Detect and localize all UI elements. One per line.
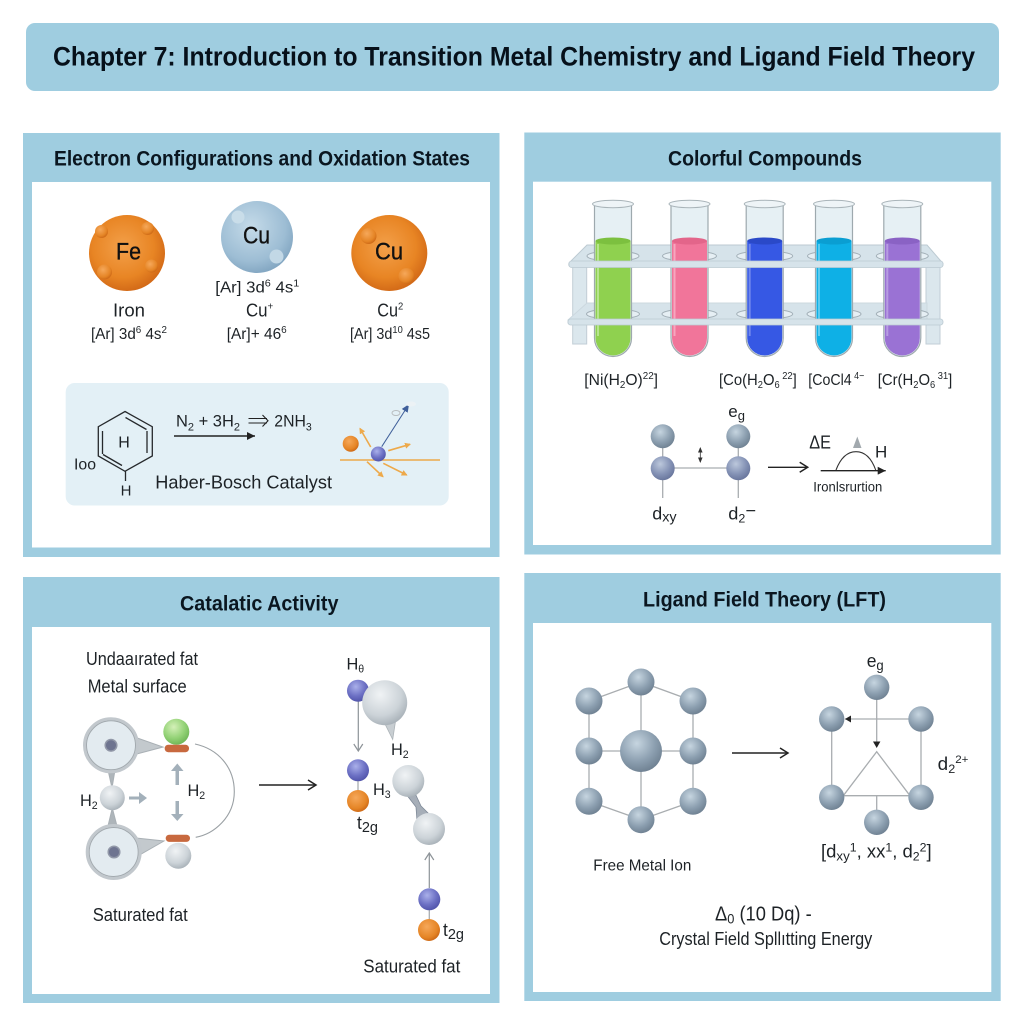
metal surface assembly: 2 — [199, 790, 205, 802]
orbital diagram: e — [728, 402, 738, 421]
label: Cu+: 1 — [293, 278, 300, 290]
label: Cu2: [Ar] 3d — [350, 326, 396, 343]
metal surface assembly — [80, 719, 234, 878]
compound labels: 22 — [643, 371, 654, 382]
label: Cu2 — [350, 300, 430, 343]
heading: colorful compounds: Colorful Compounds — [668, 146, 862, 170]
orbital diagram: d — [728, 503, 738, 523]
split field diagram: 2 — [913, 850, 920, 864]
orbital diagram: 2 — [738, 511, 746, 525]
panel: ligand field theory — [524, 573, 1001, 1001]
label: Iron: 4s — [141, 326, 162, 343]
tube: blue — [744, 200, 785, 357]
splitting energy caption: Δ — [715, 904, 728, 926]
split field diagram: g — [876, 658, 884, 673]
product molecules: H — [391, 740, 403, 759]
orbital diagram: − — [745, 500, 756, 520]
title banner — [26, 23, 999, 91]
arrow — [768, 466, 808, 468]
product molecules: t — [443, 920, 448, 940]
label: Cu2: 2 — [398, 300, 403, 312]
rack front strips — [568, 261, 943, 325]
product molecules — [346, 654, 464, 943]
orbital diagram: d — [652, 503, 662, 523]
tube: cyan — [814, 200, 854, 357]
metal surface assembly: H — [188, 781, 200, 800]
product molecules: 2g — [362, 819, 378, 836]
icon: benzene ring: Ioo — [74, 456, 96, 474]
tube: pink — [669, 200, 710, 357]
icon: benzene ring: H — [121, 482, 131, 500]
octahedral complex: free metal ion — [576, 668, 706, 833]
icon: Cu atom, orange — [351, 215, 427, 291]
tube: green — [592, 200, 634, 357]
compound labels: ] — [793, 372, 797, 389]
label: Cu+: + — [268, 300, 273, 312]
product molecules: 2 — [403, 749, 409, 761]
label: Cu+: [Ar] 3d — [215, 280, 261, 296]
split field diagram: 2+ — [955, 754, 968, 766]
split field diagram: , d — [892, 842, 913, 862]
icon: Cu atom, blue — [221, 201, 293, 273]
icon: benzene ring — [74, 412, 152, 500]
label: Cu+: 4s — [271, 280, 294, 296]
compound labels — [584, 371, 952, 391]
panel: colorful compounds — [524, 132, 1001, 554]
product molecules: 3 — [385, 789, 391, 801]
reaction equation: 2 — [188, 422, 194, 434]
reaction equation: N — [176, 412, 188, 430]
compound labels: [Ni(H — [584, 372, 621, 389]
panel: catalytic activity — [23, 577, 500, 1003]
compound labels: [CoCl4 — [808, 372, 857, 389]
label: Iron: 6 — [136, 325, 142, 336]
split field diagram — [819, 651, 968, 864]
icon: benzene ring: H — [118, 434, 130, 452]
compound labels: O — [918, 372, 930, 389]
splitting energy caption — [659, 904, 872, 949]
label: Cu2: 4s5 — [403, 326, 430, 343]
compound labels: ] — [948, 372, 952, 389]
label: saturated fat left: Saturated fat — [93, 905, 188, 925]
callout: Haber-Bosch catalyst — [66, 383, 449, 506]
compound labels: O) — [625, 372, 643, 389]
split field diagram: 1 — [850, 840, 857, 854]
compound labels: 6 — [774, 380, 780, 391]
label: Cu+: Cu — [246, 300, 269, 320]
enthalpy diagram — [809, 432, 887, 494]
label: free metal ion: Free Metal Ion — [593, 858, 691, 874]
reaction arrow — [259, 784, 316, 786]
splitting energy caption: Crystal Field Spllıtting Energy — [659, 929, 872, 949]
product molecules: θ — [358, 664, 364, 676]
reaction equation: 2NH — [274, 412, 307, 430]
label: Iron: Iron — [113, 300, 145, 320]
compound labels: [Co(H — [719, 372, 761, 389]
splitting energy caption: (10 Dq) - — [734, 904, 812, 926]
split field diagram: d — [938, 754, 948, 774]
compound labels: [Cr(H — [878, 372, 916, 389]
compound labels: 31 — [935, 371, 949, 382]
split field diagram: xy — [836, 848, 850, 864]
icon: catalyst surface — [340, 402, 440, 477]
heading: catalytic activity: Catalatic Activity — [180, 592, 339, 616]
split field diagram: 1 — [885, 840, 893, 854]
reaction equation: + 3H — [194, 412, 234, 430]
label: Cu+ — [215, 278, 300, 343]
label: Haber-Bosch Catalyst: Haber-Bosch Catalyst — [155, 472, 332, 492]
orbital diagram — [651, 402, 756, 525]
enthalpy diagram: ΔE — [809, 432, 831, 452]
orbital diagram: g — [738, 408, 745, 423]
icon: Fe atom — [89, 215, 165, 291]
icon: Fe atom: Fe — [116, 238, 141, 266]
heading: electron configurations: Electron Configurations and Oxidation States — [54, 146, 470, 170]
label: Cu2: 10 — [392, 325, 403, 336]
metal surface assembly: 2 — [92, 800, 98, 812]
split field diagram: 2 — [920, 840, 927, 854]
compound labels: 2 — [620, 380, 626, 391]
compound labels: 4− — [852, 371, 864, 382]
label: Cu+: [Ar]+ 46 — [227, 326, 281, 343]
enthalpy diagram: Ironlsrurtion — [813, 480, 882, 494]
compound labels: 6 — [930, 380, 936, 391]
transition arrow — [732, 752, 788, 754]
labels: reactants: Metal surface — [88, 677, 187, 697]
compound labels: 2 — [758, 380, 763, 391]
reaction equation — [174, 412, 312, 436]
product molecules: H — [373, 780, 385, 799]
labels: reactants: Undaaırated fat — [86, 649, 198, 669]
split field diagram: ] — [927, 842, 932, 862]
product molecules: 2g — [448, 926, 464, 943]
compound labels: 22 — [780, 371, 793, 382]
orbital diagram: xy — [662, 508, 677, 524]
tube: purple — [882, 200, 923, 357]
icon: Cu atom, blue: Cu — [243, 222, 270, 250]
split field diagram: e — [867, 651, 877, 671]
icon: Cu atom, orange: Cu — [375, 238, 403, 266]
heading: ligand field theory: Ligand Field Theory (LFT) — [643, 588, 886, 612]
label: Cu2: Cu — [377, 300, 400, 320]
label: Iron: 2 — [162, 325, 167, 336]
rack legs and plates — [568, 245, 943, 344]
splitting energy caption: 0 — [727, 910, 735, 926]
metal surface assembly: H — [80, 791, 92, 810]
reaction equation: 2 — [234, 422, 240, 434]
test tube rack — [568, 200, 943, 357]
product molecules: t — [357, 813, 362, 833]
enthalpy diagram: H — [875, 442, 887, 462]
label: Iron — [91, 300, 167, 343]
product molecules: H — [346, 654, 359, 674]
label: saturated fat right: Saturated fat — [363, 956, 460, 976]
split field diagram: 2 — [948, 762, 956, 776]
label: Cu+: 6 — [281, 325, 287, 336]
reaction equation: 3 — [306, 422, 312, 434]
label: Cu+: 6 — [265, 278, 271, 290]
split field diagram: , xx — [857, 842, 885, 862]
labels: reactants — [86, 649, 198, 697]
label: Iron: [Ar] 3d — [91, 326, 137, 343]
split field diagram: [d — [821, 842, 836, 862]
compound labels: ] — [654, 372, 658, 389]
compound labels: O — [763, 372, 774, 389]
compound labels: 2 — [913, 380, 919, 391]
